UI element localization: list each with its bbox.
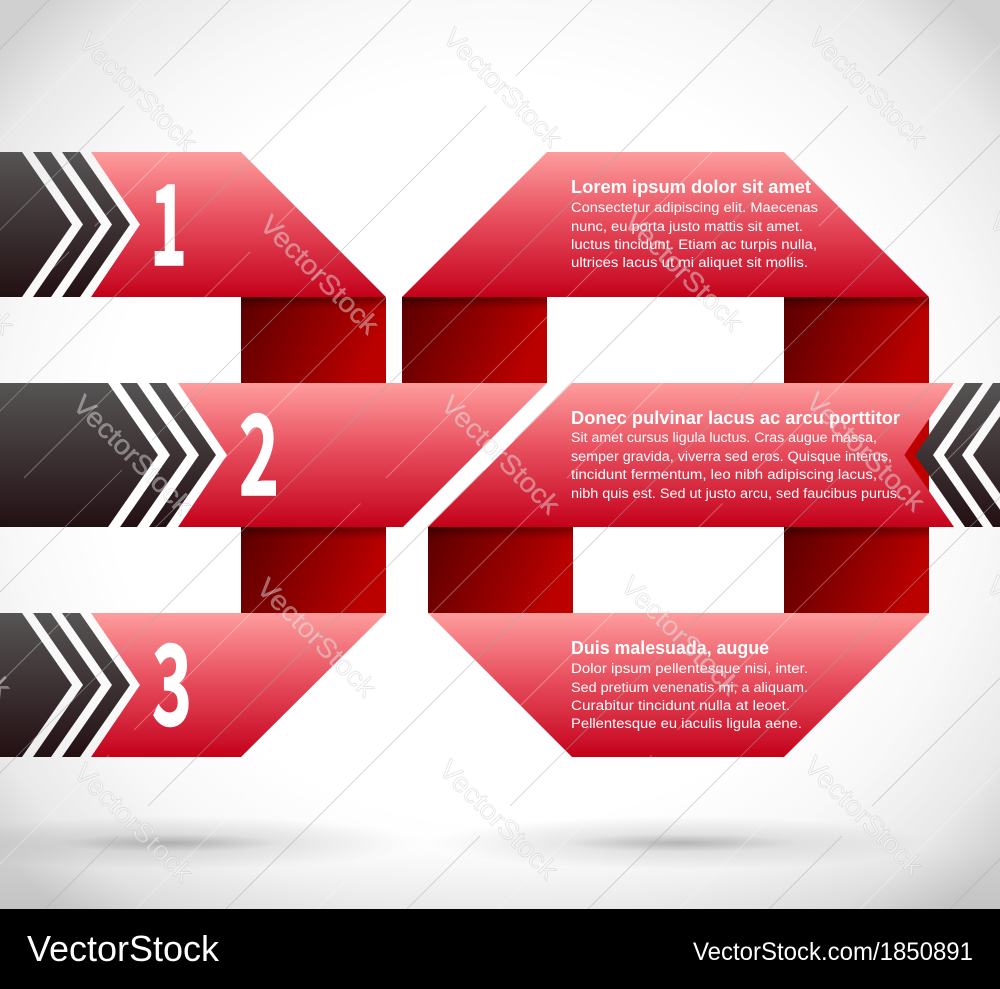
right side dark chevrons — [915, 383, 1000, 527]
watermarks: VectorStock — [68, 757, 199, 888]
watermarks: VectorStock — [435, 389, 566, 520]
row 1 dark chevrons — [0, 152, 130, 297]
floor shadows — [0, 816, 930, 870]
number 2: 2 — [239, 366, 279, 527]
text block 2 — [571, 408, 901, 501]
fold: arrow notch behind ribbon — [904, 418, 929, 492]
fold: right column lower — [784, 527, 929, 613]
fold: middle column upper — [402, 297, 547, 383]
watermarks: VectorStock — [615, 570, 746, 701]
watermarks: VectorStock — [72, 26, 203, 157]
text block 3: Duis malesuada, augue — [571, 638, 769, 658]
text block 3: Dolor ipsum pellentesque nisi, inter. — [571, 661, 808, 676]
ribbon: text panel 2 — [428, 383, 954, 527]
fold: middle column lower — [428, 527, 573, 613]
watermarks: VectorStock — [254, 209, 385, 340]
watermarks: VectorStock — [802, 22, 933, 153]
footer url: VectorStock.com/1850891 — [693, 938, 973, 966]
text block 1: nunc, eu porta justo mattis sit amet. — [571, 219, 803, 234]
ribbon: step 1 — [91, 152, 386, 297]
ribbon: step 2 — [178, 383, 547, 527]
watermarks: VectorStock — [433, 754, 564, 885]
text block 2: semper gravida, viverra sed eros. Quisque interus, — [571, 449, 892, 464]
ribbon: text panel 1 — [402, 152, 929, 297]
text block 1 — [571, 177, 818, 270]
number 3: 3 — [152, 596, 192, 757]
text block 2: Donec pulvinar lacus ac arcu porttitor — [571, 408, 900, 428]
watermarks: VectorStock — [618, 206, 749, 337]
text block 2: Sit amet cursus ligula luctus. Cras augue massa, — [571, 430, 877, 445]
fold: right column upper — [784, 297, 929, 383]
watermarks: VectorStock — [437, 22, 568, 153]
watermarks: VectorStock — [798, 750, 929, 881]
watermarks: VectorStock — [800, 386, 931, 517]
text block 1: luctus tincidunt. Etiam ac turpis nulla, — [571, 237, 817, 252]
ribbon: text panel 3 — [428, 613, 929, 757]
row 2 dark chevrons — [0, 383, 216, 527]
text block 3 — [571, 638, 808, 731]
number 1: 1 — [150, 136, 187, 297]
text block 1: Lorem ipsum dolor sit amet — [571, 177, 811, 197]
watermarks: VectorStock — [67, 389, 198, 520]
fold: left column lower — [241, 527, 386, 613]
text block 2: nibh quis est. Sed ut justo arcu, sed faucibus purus. — [571, 486, 901, 501]
fold: left column upper — [241, 297, 386, 383]
row 3 dark chevrons — [0, 613, 130, 757]
text block 2: tincidunt fermentum, leo nibh adipiscing lacus, — [571, 467, 877, 482]
ribbon: step 3 — [91, 613, 386, 757]
text block 1: ultrices lacus ut mi aliquet sit mollis. — [571, 255, 808, 270]
text block 3: Curabitur tincidunt nulla at leoet. — [571, 698, 790, 713]
text block 3: Pellentesque eu iaculis ligula aene. — [571, 716, 802, 731]
footer bar — [0, 909, 1000, 989]
text block 3: Sed pretium venenatis mi, a aliquam. — [571, 680, 808, 695]
footer logo: VectorStock — [27, 928, 220, 969]
text block 1: Consectetur adipiscing elit. Maecenas — [571, 200, 818, 215]
watermarks: VectorStock — [251, 572, 382, 703]
